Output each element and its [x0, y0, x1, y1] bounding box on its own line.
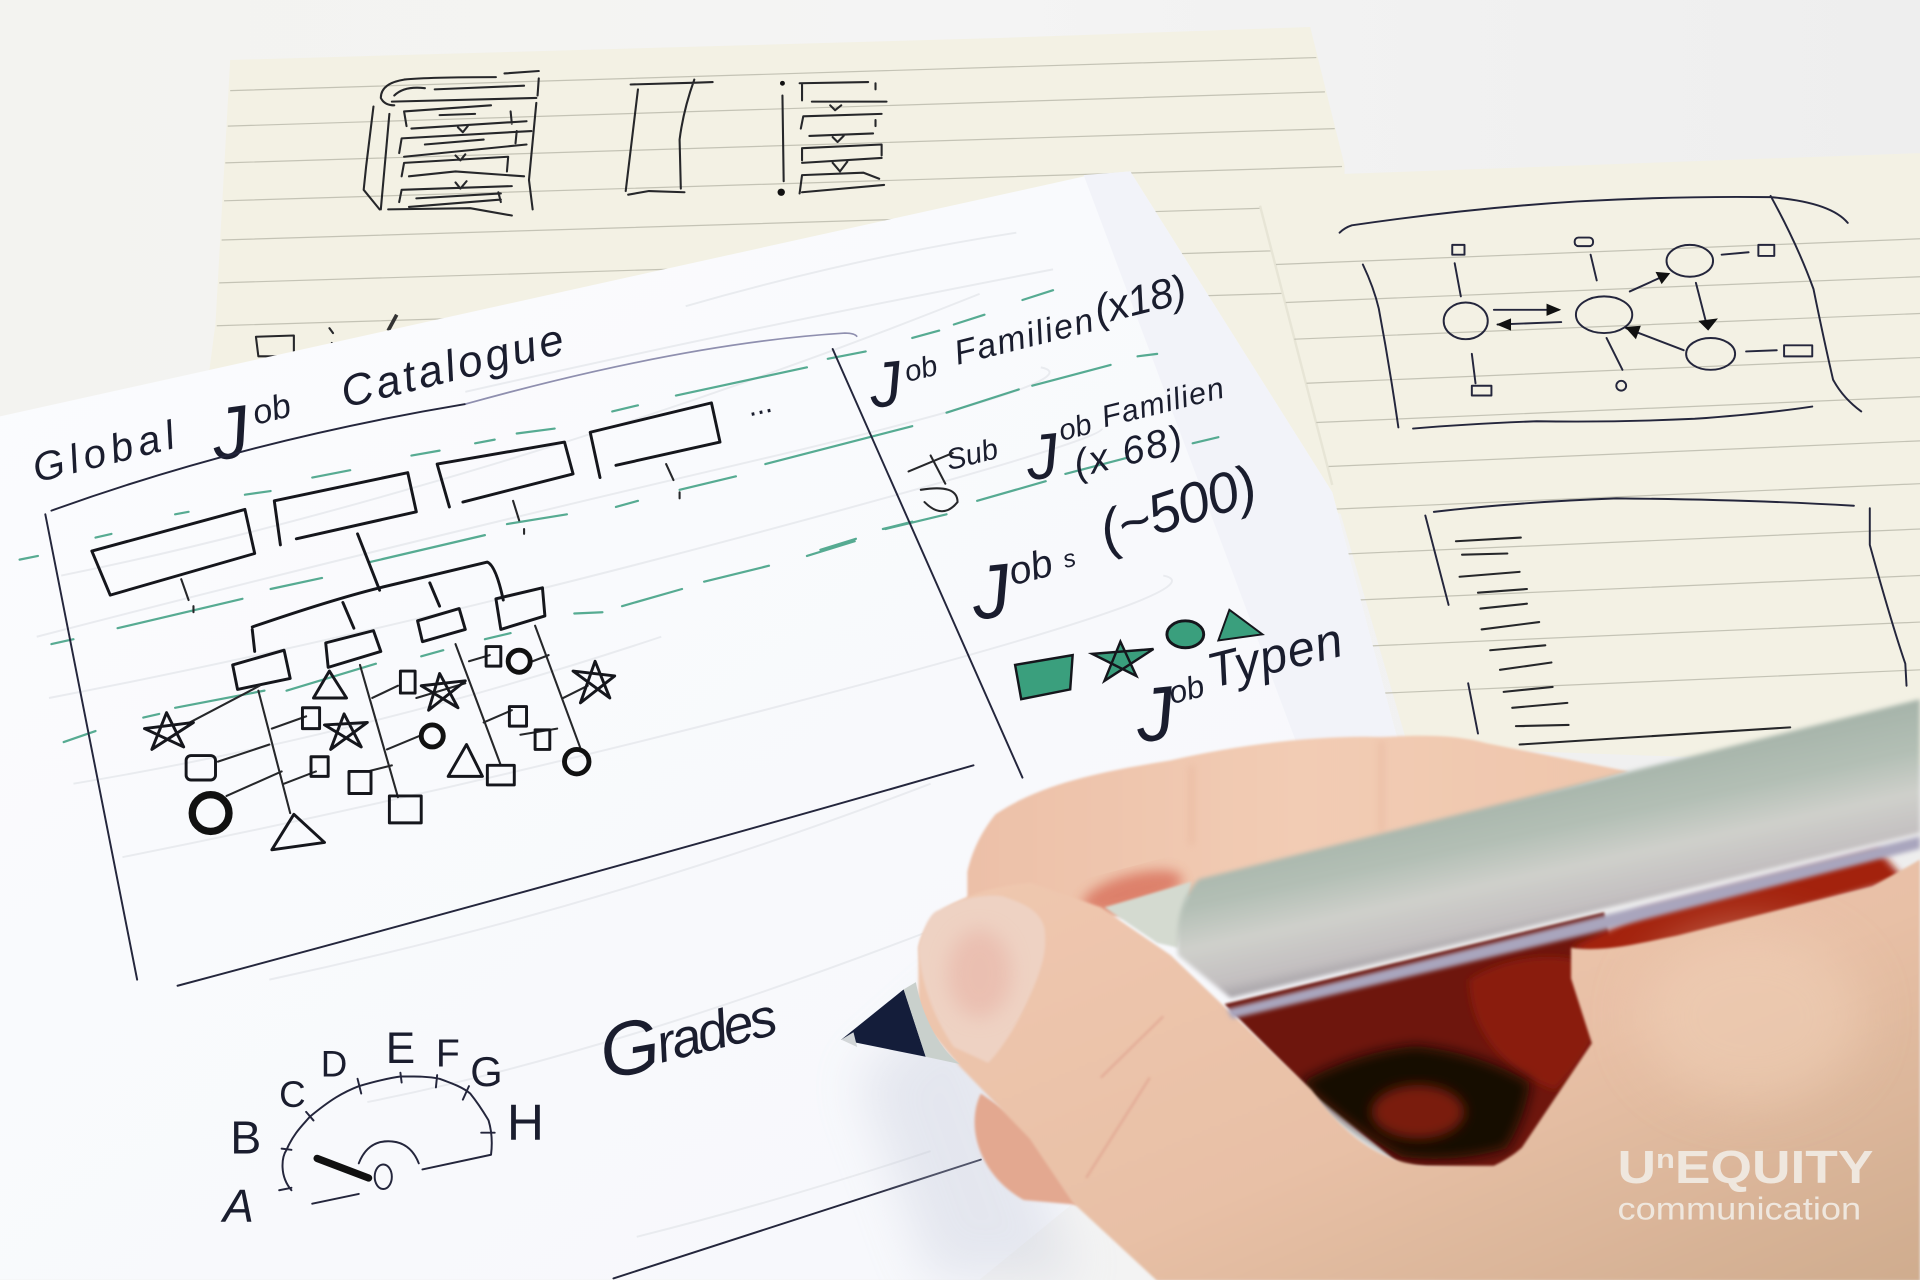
- label: Job Typen: ob: [1165, 667, 1208, 711]
- label: Job Familien (x18): J: [865, 348, 906, 422]
- label: Grades: [593, 987, 783, 1096]
- gauge: grades A to H: D: [321, 1043, 347, 1084]
- label: Sub Job Familien (x68): (x 68): [1069, 418, 1187, 486]
- red band under pen: [1571, 851, 1904, 967]
- label: Sub Job Familien (x68): J: [1022, 420, 1063, 494]
- label: Sub Job Familien (x68): Familien: [1098, 371, 1227, 434]
- pen barrel: [1177, 699, 1920, 998]
- legend: job type icons: [1015, 610, 1262, 699]
- dark shadow core: [1300, 1046, 1531, 1159]
- label: Job Familien (x18): Familien: [950, 301, 1097, 373]
- gauge: grades A to H: C: [279, 1074, 306, 1115]
- label: Grades: rades: [650, 987, 783, 1075]
- thumb and palm: [918, 860, 1920, 1280]
- gauge: grades A to H: B: [230, 1112, 261, 1164]
- bottom rules: [613, 1160, 981, 1278]
- heading: Global Job Catalogue: [28, 315, 569, 491]
- logo: UnEQUITY communication: U: [1618, 1141, 1651, 1193]
- heading: Global Job Catalogue: J: [205, 389, 255, 476]
- shadow between fingers: [1224, 912, 1616, 1169]
- ellipsis: ...: [744, 386, 775, 423]
- job hierarchy tree: [144, 534, 615, 850]
- wireframe: small square: [256, 328, 333, 356]
- hand holding pen: [841, 699, 1920, 1280]
- logo: UnEQUITY communication: [1618, 1141, 1873, 1227]
- green ruled dashes: [20, 290, 1218, 742]
- label: Jobs (~500): ob: [1004, 542, 1057, 594]
- palm highlight: [1641, 931, 1861, 1102]
- finger red shading: [1079, 862, 1187, 921]
- finger creases: [1191, 741, 1381, 845]
- label: Job Familien (x18): [865, 265, 1191, 422]
- gauge: grades A to H: H: [507, 1093, 544, 1151]
- thumbnail: [918, 896, 1045, 1063]
- logo: UnEQUITY communication: n: [1656, 1144, 1675, 1174]
- frame: catalogue outline: [45, 333, 1022, 986]
- index finger: [967, 736, 1629, 918]
- wireframe: dotted list: [778, 81, 887, 196]
- wireframe: ruled list: [1425, 498, 1907, 745]
- heading: Global Job Catalogue: Global: [28, 411, 180, 491]
- pen grip: [1104, 882, 1191, 948]
- label: Jobs (~500): J: [967, 548, 1015, 637]
- label: Job Typen: J: [1131, 670, 1179, 759]
- gauge: grades A to H: G: [470, 1048, 503, 1095]
- lower finger lobe: [975, 1094, 1078, 1205]
- label: Job Familien (x18): ob: [901, 349, 941, 389]
- label: Grades: G: [593, 1002, 666, 1096]
- gauge: grades A to H: E: [386, 1024, 415, 1073]
- logo: UnEQUITY communication: EQUITY: [1675, 1141, 1873, 1193]
- panel: back note with list wireframes: [208, 27, 1347, 514]
- label: Sub Job Familien (x68): ob: [1055, 408, 1095, 448]
- label: Jobs (~500): (~500): [1091, 453, 1264, 562]
- logo: UnEQUITY communication: communication: [1618, 1191, 1861, 1227]
- label: Job Familien (x18): (x18): [1089, 265, 1191, 333]
- inner red shape: [1371, 1085, 1464, 1139]
- label: Job Typen: [1131, 613, 1348, 759]
- pen lower highlight: [1227, 836, 1920, 1019]
- wireframe: accordion list: [364, 71, 539, 216]
- label: Sub Job Familien (x68): Sub: [943, 432, 1001, 477]
- label: Jobs (~500): s: [1060, 545, 1079, 574]
- label: Job Typen: Typen: [1202, 613, 1348, 699]
- gauge: grades A to H: A: [220, 1180, 254, 1232]
- label: Jobs (~500): [967, 453, 1264, 637]
- panel: right notebook: [1260, 153, 1920, 765]
- pen tip: [841, 989, 926, 1057]
- label: Sub Job Familien (x68): [909, 371, 1227, 511]
- show-through ghost writing: [37, 233, 1172, 1237]
- red finger in shadow: [1469, 957, 1599, 1090]
- thumb creases: [1086, 1016, 1163, 1178]
- gauge: grades A to H: F: [436, 1033, 460, 1076]
- heading: Global Job Catalogue: ob: [249, 387, 295, 433]
- thumbnail pink: [948, 929, 1011, 1018]
- hand shadow on paper: [857, 980, 1078, 1280]
- panel: white sketch sheet: [0, 171, 1397, 1280]
- heading: Global Job Catalogue: Catalogue: [336, 315, 569, 417]
- gauge: grades A to H: [220, 1024, 544, 1232]
- job type icons in tree: [144, 647, 615, 850]
- job family boxes: [92, 386, 775, 612]
- wireframe: network diagram: [1340, 196, 1861, 429]
- wireframe: empty column: [626, 80, 713, 195]
